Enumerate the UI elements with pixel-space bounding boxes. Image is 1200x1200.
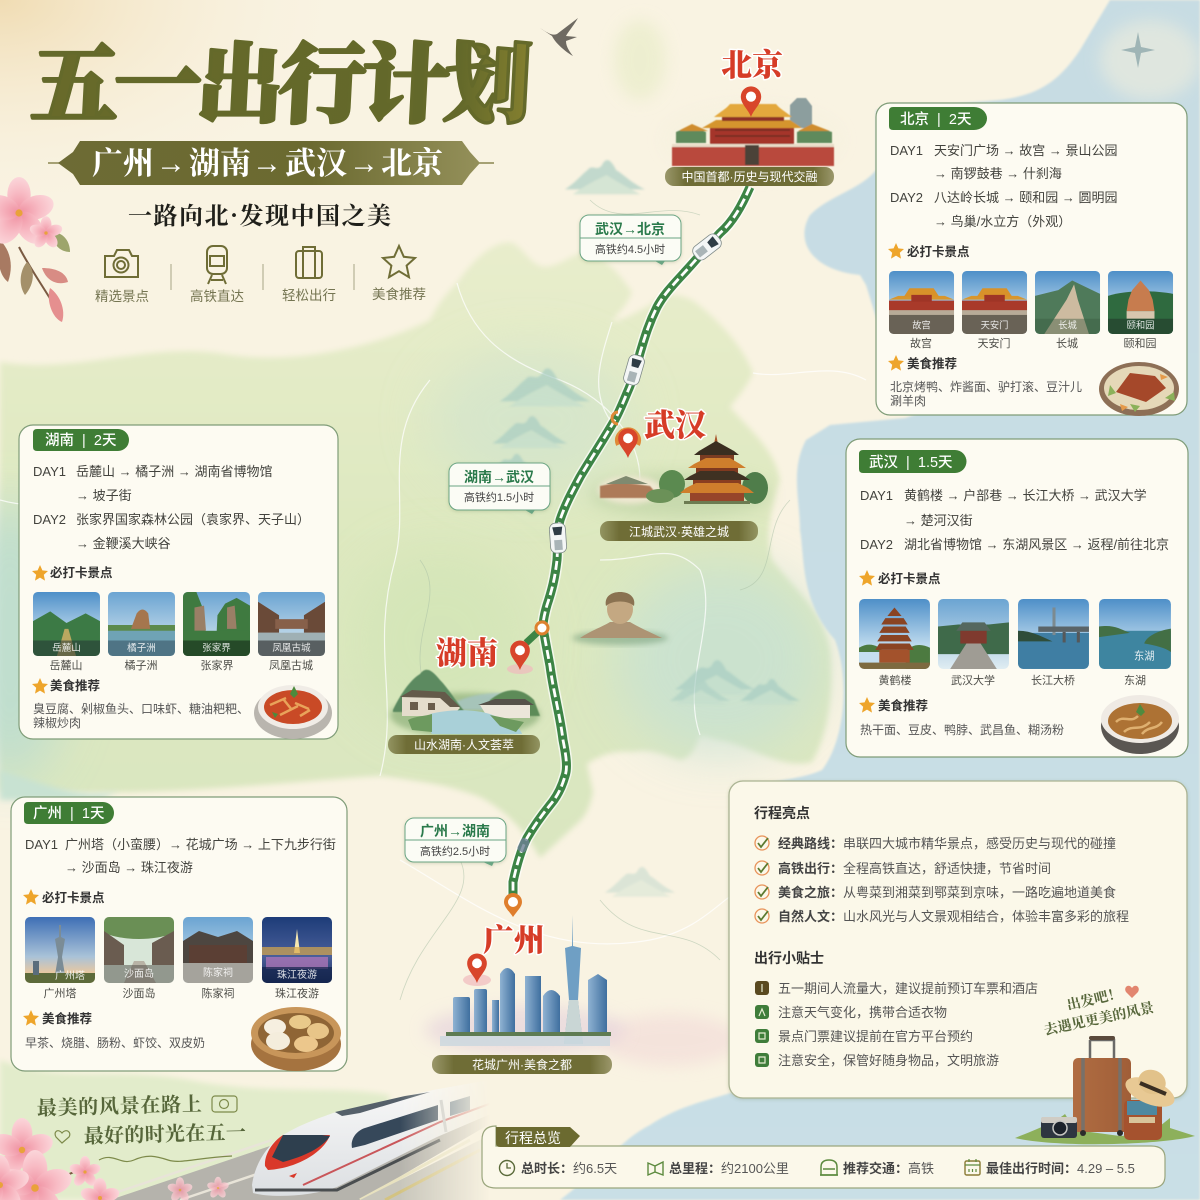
photo captions: 张家界: [200, 658, 234, 672]
Guangzhou ribbon: [432, 1055, 612, 1074]
photo: East Lake: 东湖: [1134, 649, 1155, 662]
list: highlights: [755, 836, 1129, 924]
itinerary: → 坡子街: [76, 488, 132, 503]
itinerary: [860, 488, 1169, 552]
food list: [890, 379, 1082, 408]
Wuhan pin: [618, 428, 638, 458]
tag: [33, 429, 129, 451]
must-see heading: [23, 889, 105, 905]
handwritten slogan: 最美的风景在路上: [36, 1088, 202, 1121]
photo: Yangtze Bridge: [1018, 599, 1089, 669]
route banner: 湖南: [189, 138, 251, 183]
Wuhan label: 武汉: [644, 400, 706, 445]
Guangzhou pin: [463, 953, 491, 986]
photo: Canton Tower: 广州塔: [55, 969, 85, 982]
backpack: [1124, 1100, 1162, 1140]
must-see heading: [32, 565, 113, 581]
food list: 早茶、烧腊、肠粉、虾饺、双皮奶: [25, 1035, 205, 1050]
photo captions: [44, 986, 319, 1000]
Beijing ribbon: 中国首都·历史与现代交融: [682, 169, 818, 184]
photo: Orange Isle: 橘子洲: [127, 643, 156, 654]
photo: Shamian Island: [104, 917, 174, 983]
itinerary: → 沙面岛 → 珠江夜游: [65, 860, 193, 875]
itinerary: DAY2: [890, 190, 923, 205]
photo captions: 故宫: [910, 336, 932, 350]
photo captions: 东湖: [1124, 674, 1146, 687]
itinerary: [890, 143, 1117, 229]
itinerary: DAY1: [860, 488, 893, 503]
dish: dim sum: [251, 1007, 341, 1071]
suitcase: [1073, 1036, 1131, 1136]
handwritten note: 去遇见更美的风景: [1042, 997, 1157, 1040]
Beijing: palace illustration: [664, 98, 840, 174]
Wuhan: Yellow Crane Tower illustration: [590, 434, 770, 517]
itinerary: 张家界国家森林公园（袁家界、天子山）: [76, 512, 310, 527]
photo captions: [50, 658, 313, 672]
photo captions: 颐和园: [1124, 337, 1156, 350]
photo: Orange Isle: [108, 592, 175, 656]
Wuhan ribbon: 江城武汉·英雄之城: [629, 524, 729, 539]
photo captions: 长城: [1056, 337, 1078, 350]
itinerary: 八达岭长城 → 颐和园 → 圆明园: [934, 190, 1117, 205]
route banner: 武汉: [285, 138, 347, 183]
label: 精选景点: 精选景点: [95, 289, 149, 304]
photo captions: 长江大桥: [1031, 673, 1075, 687]
photo: Tiananmen: [962, 271, 1027, 334]
camera: [1041, 1117, 1077, 1138]
itinerary: DAY2: [33, 512, 66, 527]
list: tips: 注意天气变化，携带合适衣物: [778, 1005, 947, 1020]
grass: [1015, 1114, 1195, 1144]
Guangzhou ribbon: 花城广州·美食之都: [472, 1057, 572, 1072]
itinerary: 天安门广场 → 故宫 → 景山公园: [934, 143, 1117, 158]
icon: swallow: [540, 18, 578, 56]
itinerary: DAY1: [25, 837, 58, 852]
food heading: [32, 678, 100, 694]
Hunan pin: [507, 640, 533, 674]
Beijing pin: [741, 86, 761, 117]
photo: Pearl River cruise: 珠江夜游: [277, 968, 317, 981]
route rail: [513, 187, 750, 895]
route banner: 北京: [381, 138, 444, 183]
photo captions: 沙面岛: [122, 986, 156, 1000]
Guangzhou label: 广州: [483, 915, 545, 960]
luggage illustration: [1015, 1036, 1195, 1144]
food heading: 美食推荐: [50, 678, 100, 693]
list: tips: [755, 981, 1038, 1068]
photo: Shamian Island: 沙面岛: [124, 967, 154, 980]
food heading: 美食推荐: [878, 698, 928, 713]
panel: Wuhan: [846, 439, 1188, 757]
trains on route: [516, 231, 724, 853]
itinerary: 广州塔（小蛮腰）→ 花城广场 → 上下九步行街: [65, 837, 336, 852]
Hunan ribbon: [388, 735, 540, 754]
food list: 北京烤鸭、炸酱面、驴打滚、豆汁儿: [890, 379, 1082, 394]
route banner: →: [252, 147, 282, 180]
must-see heading: [888, 243, 970, 259]
dish: chili stir fry: [254, 685, 332, 739]
food heading: [859, 697, 928, 713]
photo: Great Wall: [1035, 271, 1100, 334]
list: highlights: 经典路线：串联四大城市精华景点，感受历史与现代的碰撞: [778, 836, 1116, 851]
photo captions: 武汉大学: [951, 673, 995, 687]
callout: Wuhan to Beijing: 武汉→北京: [595, 221, 665, 237]
callout: Hunan to Wuhan: [449, 463, 550, 514]
dish: noodles: [1101, 695, 1179, 754]
Wuhan ribbon: [600, 521, 758, 541]
tag: [859, 450, 966, 473]
ink mountains: [485, 160, 800, 897]
tag: 北京 | 2天: [900, 110, 972, 128]
itinerary: DAY1: [890, 143, 923, 158]
list: highlights: 高铁出行：全程高铁直达，舒适快捷，节省时间: [778, 861, 1051, 876]
photo: Forbidden City: 故宫: [912, 319, 931, 330]
route banner: [48, 138, 494, 185]
heading: highlights: 行程亮点: [754, 805, 810, 821]
tag: 湖南 | 2天: [45, 432, 117, 449]
photo: Forbidden City: [889, 271, 954, 334]
must-see heading: 必打卡景点: [42, 890, 105, 905]
photo: Fenghuang: [258, 592, 325, 656]
photo: Zhangjiajie: [183, 592, 250, 656]
photo: Yuelu Mountain: 岳麓山: [52, 642, 81, 654]
stat: distance: 总里程：约2100公里: [669, 1161, 789, 1176]
photo: Tiananmen: 天安门: [981, 319, 1008, 330]
photo: Chen Clan Hall: 陈家祠: [203, 966, 233, 979]
callout: Guangzhou to Hunan: [405, 818, 506, 866]
itinerary: [25, 837, 336, 875]
list: highlights: 美食之旅：从粤菜到湘菜到鄂菜到京味，一路吃遍地道美食: [778, 885, 1116, 900]
must-see heading: [859, 570, 941, 586]
itinerary: → 楚河汉街: [904, 513, 973, 528]
route banner: →: [156, 147, 186, 180]
itinerary: 黄鹤楼 → 户部巷 → 长江大桥 → 武汉大学: [904, 488, 1147, 503]
photo captions: 黄鹤楼: [878, 673, 912, 687]
photo: Chen Clan Hall: [183, 917, 253, 983]
tag: [889, 107, 987, 130]
photo: Wuhan University: [938, 599, 1009, 669]
Beijing label: 北京: [721, 40, 784, 85]
food list: 辣椒炒肉: [33, 716, 81, 730]
list: highlights: 自然人文：山水风光与人文景观相结合，体验丰富多彩的旅程: [778, 909, 1129, 924]
itinerary: DAY1: [33, 464, 66, 479]
photo captions: 凤凰古城: [269, 659, 313, 672]
flowers: top left: [0, 177, 70, 322]
photo: Summer Palace: [1108, 271, 1173, 334]
callout: Wuhan to Beijing: [580, 215, 681, 265]
icon: compass star: [1121, 32, 1155, 68]
tab: 行程总览: [505, 1130, 561, 1146]
bottom road and train: [114, 1086, 486, 1200]
route banner: 广州: [92, 138, 154, 183]
tag: 广州 | 1天: [33, 805, 105, 822]
list: tips: 五一期间人流量大，建议提前预订车票和酒店: [778, 981, 1038, 996]
callout: Hunan to Wuhan: 高铁约1.5小时: [464, 490, 534, 504]
label: 轻松出行: 轻松出行: [282, 288, 336, 303]
straw hat: [1121, 1066, 1179, 1113]
route banner: →: [349, 147, 379, 180]
label: 高铁直达: 高铁直达: [190, 288, 244, 304]
icon: star: [383, 246, 415, 277]
food list: [33, 701, 249, 730]
stat: transport: 推荐交通：高铁: [843, 1161, 934, 1176]
handwritten note: 出发吧！: [1065, 983, 1124, 1015]
tag: [24, 802, 114, 824]
photo: Fenghuang: 凤凰古城: [272, 642, 311, 654]
photo: Summer Palace: 颐和园: [1127, 319, 1154, 330]
title: 五一出行计划: [29, 15, 535, 140]
panel: Guangzhou: [11, 797, 347, 1071]
itinerary: [33, 464, 310, 551]
panel: Beijing: [876, 103, 1187, 416]
food heading: 美食推荐: [42, 1011, 92, 1026]
Beijing ribbon: [665, 167, 834, 186]
photo: Pearl River cruise: [262, 917, 332, 983]
photo: Great Wall: 长城: [1058, 319, 1077, 330]
handwritten slogan: [36, 1088, 246, 1162]
food list: 臭豆腐、剁椒鱼头、口味虾、糖油粑粑、: [33, 701, 249, 716]
route nodes: [504, 412, 639, 917]
tag: 武汉 | 1.5天: [869, 454, 953, 471]
list: tips: 景点门票建议提前在官方平台预约: [778, 1029, 973, 1044]
photo captions: [910, 336, 1156, 350]
heading: tips: 出行小贴士: [754, 950, 824, 966]
itinerary: → 鸟巢/水立方（外观）: [934, 214, 1071, 229]
food heading: [23, 1010, 92, 1026]
list: tips: 注意安全，保管好随身物品，文明旅游: [778, 1053, 999, 1068]
callout: Guangzhou to Hunan: 广州→湖南: [420, 823, 490, 839]
Hunan: landscape illustration: [390, 670, 540, 737]
photo captions: 珠江夜游: [275, 986, 319, 1000]
food list: 涮羊肉: [890, 393, 926, 408]
label: 美食推荐: 美食推荐: [372, 286, 426, 302]
photo: East Lake: [1099, 599, 1171, 669]
must-see heading: 必打卡景点: [878, 571, 941, 586]
photo captions: 橘子洲: [124, 659, 158, 672]
stat: duration: 总时长：约6.5天: [521, 1161, 617, 1176]
Guangzhou: skyline illustration: [425, 915, 625, 1054]
must-see heading: 必打卡景点: [907, 244, 970, 259]
icon: camera: [105, 250, 138, 277]
itinerary: → 金鞭溪大峡谷: [76, 536, 171, 551]
callout: Hunan to Wuhan: 湖南→武汉: [464, 469, 534, 485]
itinerary: → 南锣鼓巷 → 什刹海: [934, 166, 1062, 181]
stat: best time: 最佳出行时间：4.29 – 5.5: [986, 1161, 1135, 1176]
itinerary: 岳麓山 → 橘子洲 → 湖南省博物馆: [76, 464, 272, 479]
photo captions: [878, 673, 1146, 687]
panel: Hunan: [19, 425, 338, 739]
Hunan label: 湖南: [436, 628, 498, 673]
panel: highlights and tips: [729, 781, 1187, 1098]
photo captions: 陈家祠: [202, 986, 234, 1000]
bust statue: [572, 592, 668, 645]
flowers: bottom left: [0, 1118, 230, 1200]
handwritten slogan: 最好的时光在五一: [83, 1116, 246, 1149]
icon: train: [207, 246, 227, 284]
photo captions: 天安门: [978, 336, 1010, 350]
subtitle: 一路向北·发现中国之美: [128, 196, 391, 231]
feature icons: [95, 246, 426, 304]
food heading: 美食推荐: [907, 356, 957, 371]
photo: Canton Tower: [25, 917, 95, 983]
photo: Zhangjiajie: 张家界: [202, 642, 231, 654]
callout: Guangzhou to Hunan: 高铁约2.5小时: [420, 844, 490, 858]
food heading: [888, 355, 957, 371]
photo: Yellow Crane Tower: [859, 599, 930, 669]
photo: Yuelu Mountain: [33, 592, 100, 656]
photo captions: 广州塔: [44, 987, 76, 1000]
tab: [496, 1127, 580, 1147]
food list: 热干面、豆皮、鸭脖、武昌鱼、糊汤粉: [860, 722, 1064, 737]
Hunan ribbon: 山水湖南·人文荟萃: [414, 737, 514, 752]
dish: roast duck: [1099, 362, 1179, 416]
photo captions: 岳麓山: [50, 659, 82, 672]
summary panel: [482, 1126, 1165, 1188]
callout: Wuhan to Beijing: 高铁约4.5小时: [595, 242, 665, 256]
must-see heading: 必打卡景点: [50, 565, 113, 580]
icon: suitcase: [296, 247, 322, 278]
itinerary: 湖北省博物馆 → 东湖风景区 → 返程/前往北京: [904, 537, 1169, 552]
itinerary: DAY2: [860, 537, 893, 552]
